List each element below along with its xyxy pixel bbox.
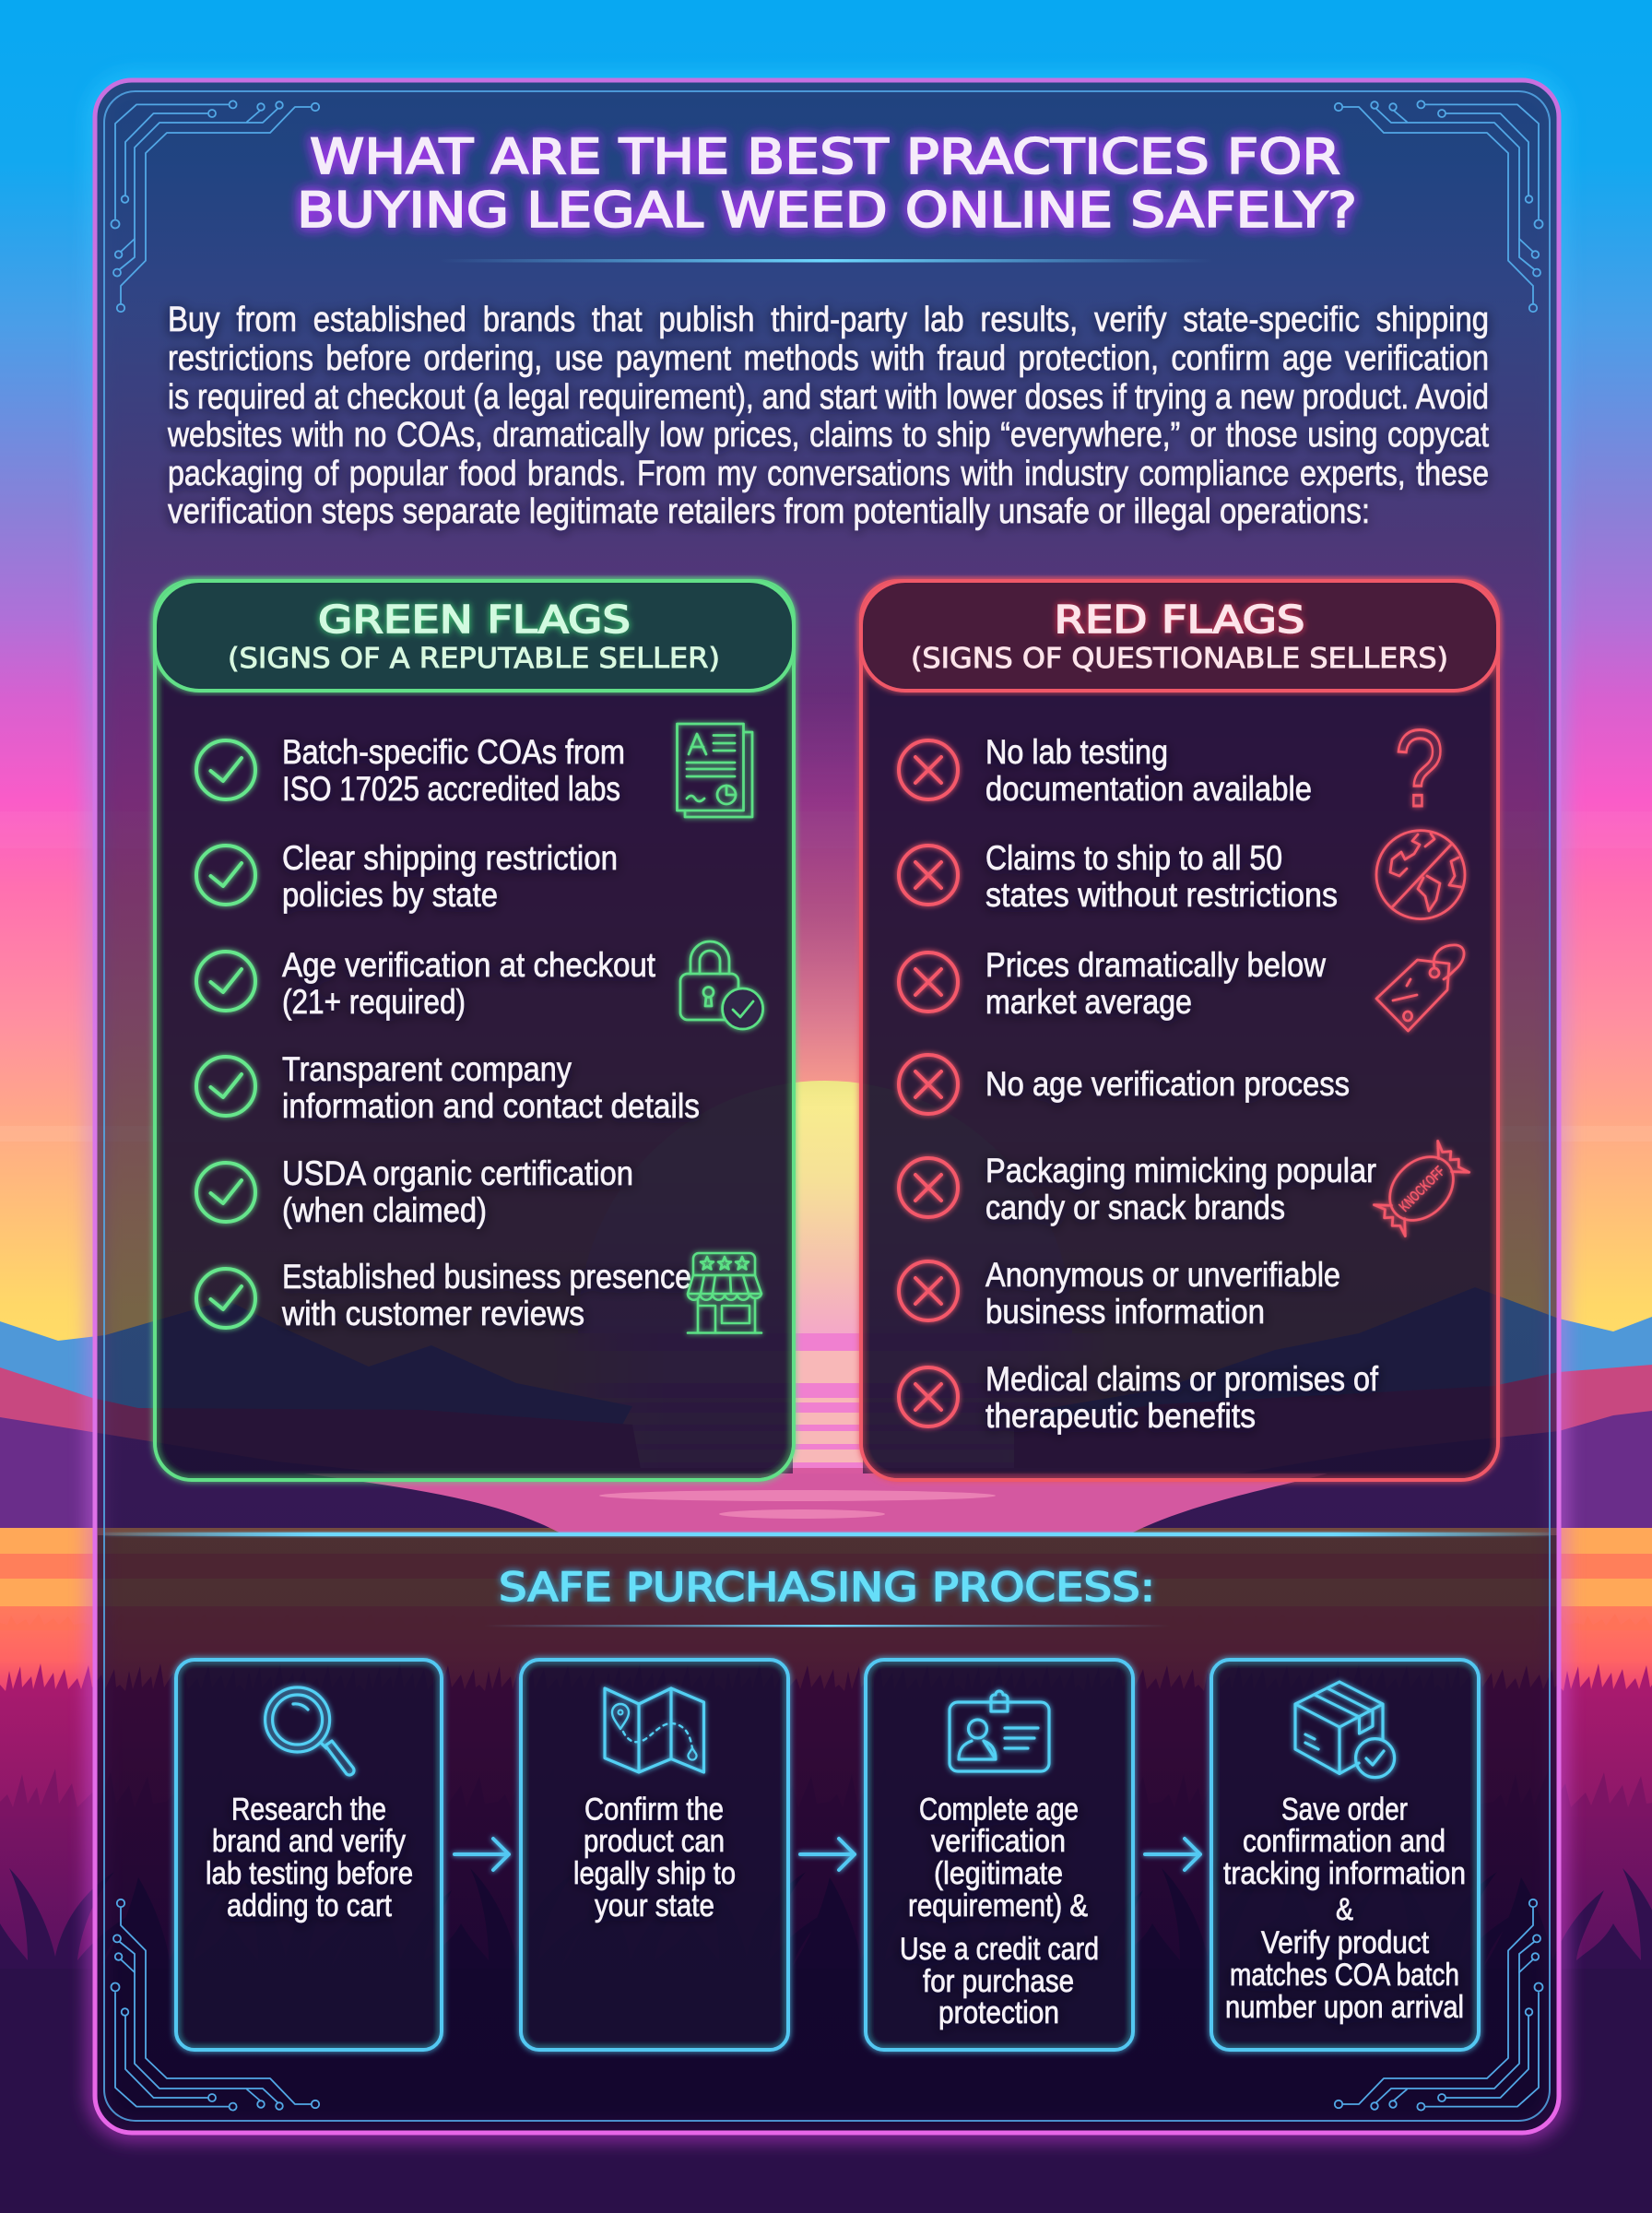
step text xyxy=(900,1793,1099,2030)
x icon xyxy=(899,1367,958,1426)
item: USDA organic xyxy=(196,1154,633,1229)
item text xyxy=(282,946,656,1021)
step 4: save order and verify xyxy=(1211,1660,1479,2050)
step text: brand and verify xyxy=(212,1824,406,1859)
step 2: confirm shipping xyxy=(521,1660,788,2050)
item text: states without restrictions xyxy=(985,876,1338,914)
item: no age verification xyxy=(899,1055,1350,1114)
green card frame xyxy=(155,581,794,1480)
item text: with customer reviews xyxy=(281,1295,584,1332)
circuit corner: top right xyxy=(1335,101,1543,312)
title xyxy=(297,129,1357,239)
step text: tracking information xyxy=(1223,1856,1466,1891)
item text xyxy=(282,733,625,808)
item text: Clear shipping restriction xyxy=(282,839,618,877)
x icon xyxy=(899,740,958,799)
step text: Use a credit card xyxy=(900,1932,1099,1967)
item: ship to all states xyxy=(899,839,1338,914)
title: WHAT ARE THE BEST PRACTICES FOR xyxy=(310,129,1340,185)
icon: knockoff candy xyxy=(1369,1136,1474,1241)
item: business presence xyxy=(196,1258,691,1332)
check icon xyxy=(196,1163,255,1222)
step box xyxy=(176,1660,442,2050)
center lake below the cards xyxy=(304,1473,1328,1534)
arrow 1 xyxy=(454,1839,509,1870)
step text: Save order xyxy=(1281,1793,1408,1828)
icon: storefront with stars xyxy=(688,1253,761,1333)
step text: Verify product xyxy=(1261,1925,1429,1960)
item text xyxy=(282,839,618,914)
item text xyxy=(985,1256,1340,1331)
step text: requirement) & xyxy=(908,1888,1088,1923)
check icon xyxy=(196,952,255,1011)
center gap: sun seen through panel xyxy=(793,730,863,1473)
item text xyxy=(985,946,1326,1021)
intro paragraph: Buy from established brands that publish third-party lab results, verify state-specific shipping xyxy=(168,301,1489,339)
step text: & xyxy=(1336,1892,1353,1927)
panel: red flags xyxy=(861,581,1498,1480)
item text: No lab testing xyxy=(985,733,1168,771)
item text: USDA organic certification xyxy=(282,1154,633,1192)
item text: market average xyxy=(985,983,1192,1021)
item text xyxy=(281,1258,691,1332)
step text: for purchase xyxy=(923,1964,1074,1999)
item text xyxy=(985,1152,1376,1226)
item text: Transparent company xyxy=(282,1050,572,1088)
circuit corner: top left xyxy=(111,101,319,312)
check icon xyxy=(196,846,255,905)
lower section shade xyxy=(98,1535,1557,2131)
red header xyxy=(861,581,1498,691)
item text xyxy=(985,839,1338,914)
item: batch COAs xyxy=(196,733,625,808)
step box xyxy=(521,1660,788,2050)
item text: candy or snack brands xyxy=(985,1189,1285,1226)
item: medical claims xyxy=(899,1360,1379,1435)
x icon xyxy=(899,1261,958,1320)
step text: adding to cart xyxy=(227,1888,392,1923)
check icon xyxy=(196,1057,255,1116)
green subheading: (SIGNS OF A REPUTABLE SELLER) xyxy=(228,643,720,675)
item: mimicking packaging xyxy=(899,1152,1376,1226)
section divider line xyxy=(104,1533,1550,1536)
icon: knockoff candy: KNOCKOFF xyxy=(1396,1163,1448,1215)
item text: No age verification process xyxy=(985,1065,1350,1103)
check icon xyxy=(196,1269,255,1328)
item: anonymous xyxy=(899,1256,1340,1331)
step text: protection xyxy=(938,1995,1059,2030)
icon: padlock with check xyxy=(680,941,763,1029)
step text: Research the xyxy=(231,1793,386,1828)
step text xyxy=(1223,1793,1466,2025)
circuit corner: bottom right xyxy=(1335,1899,1543,2111)
icon: map with route xyxy=(605,1688,704,1772)
panel: green flags xyxy=(155,581,794,1480)
item text xyxy=(985,733,1312,808)
intro paragraph: verification steps separate legitimate retailers from potentially unsafe or illegal operations: xyxy=(168,492,1370,531)
red card frame xyxy=(861,581,1498,1480)
item text: information and contact details xyxy=(282,1087,700,1125)
step text xyxy=(573,1793,736,1923)
circuit corner: bottom left xyxy=(111,1899,319,2111)
step text: (legitimate xyxy=(934,1856,1063,1891)
process heading divider xyxy=(484,1625,1171,1627)
item text: Medical claims or promises of xyxy=(985,1360,1379,1398)
x icon xyxy=(899,1055,958,1114)
item: low prices xyxy=(899,946,1326,1021)
item text: Age verification at checkout xyxy=(282,946,656,984)
step text: matches COA batch xyxy=(1230,1958,1459,1993)
item text: therapeutic benefits xyxy=(985,1397,1256,1435)
step 3: age verification and credit card xyxy=(866,1660,1133,2050)
step box xyxy=(866,1660,1133,2050)
green heading: GREEN FLAGS xyxy=(318,598,631,642)
item: company information xyxy=(196,1050,700,1125)
green header xyxy=(155,581,794,691)
item text: Claims to ship to all 50 xyxy=(985,839,1282,877)
step text: your state xyxy=(595,1888,714,1923)
check icon xyxy=(196,740,255,799)
item: no lab testing xyxy=(899,733,1312,808)
step text xyxy=(206,1793,413,1923)
icon: magnifying glass xyxy=(266,1687,354,1775)
red subheading: (SIGNS OF QUESTIONABLE SELLERS) xyxy=(911,643,1448,675)
item text xyxy=(282,1154,633,1229)
safe purchasing process heading: SAFE PURCHASING PROCESS: xyxy=(499,1565,1155,1611)
step 1: research xyxy=(176,1660,442,2050)
item text xyxy=(985,1360,1379,1435)
arrow 2 xyxy=(800,1839,855,1870)
step text: product can xyxy=(584,1824,725,1859)
step text: confirmation and xyxy=(1243,1824,1446,1859)
item: age verification xyxy=(196,946,656,1021)
step box xyxy=(1211,1660,1479,2050)
x icon xyxy=(899,846,958,905)
item: shipping policies xyxy=(196,839,618,914)
item text: Prices dramatically below xyxy=(985,946,1326,984)
title: BUYING LEGAL WEED ONLINE SAFELY? xyxy=(297,183,1357,239)
red heading: RED FLAGS xyxy=(1055,598,1305,642)
icon: lab document xyxy=(677,724,752,817)
step text: verification xyxy=(931,1824,1066,1859)
icon: ID badge xyxy=(950,1691,1049,1771)
item text: Batch-specific COAs from xyxy=(282,733,625,771)
item text: (21+ required) xyxy=(282,983,466,1021)
x icon xyxy=(899,1158,958,1217)
step text: number upon arrival xyxy=(1225,1990,1464,2025)
step text: Complete age xyxy=(919,1793,1079,1828)
item text: business information xyxy=(985,1293,1265,1331)
step text: legally ship to xyxy=(573,1856,736,1891)
item text: documentation available xyxy=(985,770,1312,808)
item text: Established business presence xyxy=(282,1258,691,1296)
icon: question mark: ? xyxy=(1395,708,1444,830)
step text: lab testing before xyxy=(206,1856,413,1891)
item text: Packaging mimicking popular xyxy=(985,1152,1376,1189)
icon: discount price tag xyxy=(1376,945,1464,1031)
arrow 3 xyxy=(1145,1839,1200,1870)
x icon xyxy=(899,953,958,1012)
item text: Anonymous or unverifiable xyxy=(985,1256,1340,1294)
title divider xyxy=(439,259,1213,262)
item text: ISO 17025 accredited labs xyxy=(282,770,620,808)
icon: crossed-out globe xyxy=(1376,831,1465,919)
intro paragraph xyxy=(167,301,1489,531)
item text xyxy=(282,1050,700,1125)
step text: Confirm the xyxy=(584,1793,724,1828)
icon: package with check xyxy=(1295,1682,1395,1778)
item text: policies by state xyxy=(282,876,498,914)
item text: (when claimed) xyxy=(282,1191,487,1229)
